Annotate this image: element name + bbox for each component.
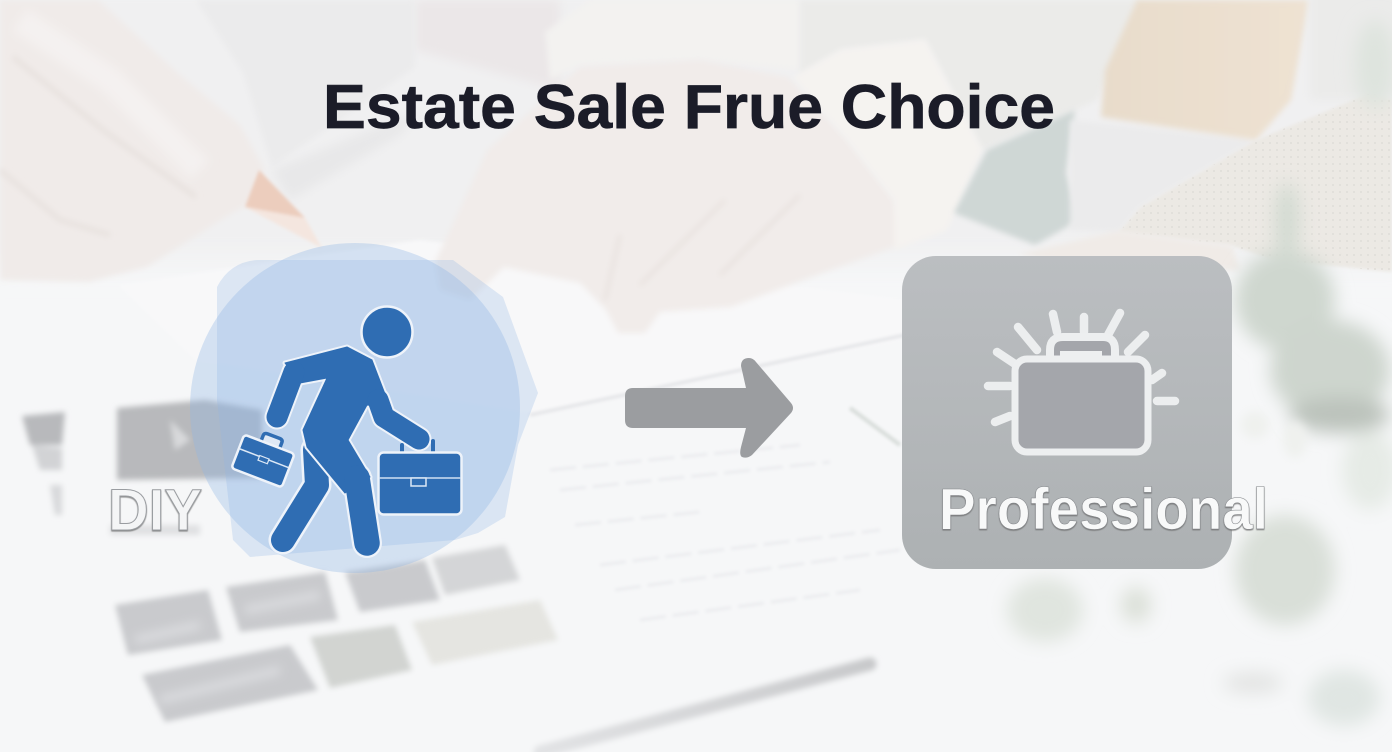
backdrop right of wood xyxy=(1310,0,1392,100)
person body xyxy=(277,347,419,543)
label: DIY: DIY xyxy=(108,478,202,543)
icon: person carrying two briefcases xyxy=(231,306,462,543)
pink backdrop xyxy=(415,0,560,90)
person body outline xyxy=(277,347,419,543)
shadow below newspaper xyxy=(272,110,420,200)
sheet of paper xyxy=(118,240,910,415)
pencil xyxy=(245,170,322,248)
sleeve knit texture xyxy=(1119,93,1392,272)
right sleeve xyxy=(1119,93,1392,272)
right briefcase xyxy=(378,452,462,514)
label: Professional: Professional xyxy=(939,477,1268,542)
icon: glowing briefcase xyxy=(988,313,1175,452)
irregular blob shape xyxy=(217,260,538,557)
title: Estate Sale Frue Choice xyxy=(323,73,1055,142)
white blossoms xyxy=(1241,411,1307,458)
second pen xyxy=(850,408,900,445)
sweater arm xyxy=(800,0,1141,150)
sweater top xyxy=(545,0,800,80)
pen at bottom xyxy=(540,664,870,752)
desk tone xyxy=(0,0,1392,260)
left hand xyxy=(0,0,263,282)
arrow xyxy=(625,358,793,458)
newspaper xyxy=(196,0,415,167)
sweater cuff xyxy=(793,40,982,250)
circle shape xyxy=(190,243,520,573)
table surface xyxy=(1070,120,1256,232)
briefcase body xyxy=(1015,359,1148,452)
left briefcase xyxy=(231,426,298,487)
right briefcase handles xyxy=(402,441,433,452)
center hand xyxy=(435,60,905,333)
blurred document text lines xyxy=(550,445,900,620)
photo sheet thumbnails xyxy=(22,400,558,722)
dark green cuff xyxy=(954,110,1079,245)
person head xyxy=(362,306,412,358)
panel: Professional xyxy=(902,256,1268,569)
briefcase rays xyxy=(988,313,1175,422)
briefcase handle xyxy=(1050,337,1115,362)
thumbnail highlights xyxy=(135,595,320,700)
panel background xyxy=(902,256,1232,569)
right hand xyxy=(1018,231,1240,270)
handle opening xyxy=(1060,351,1102,363)
plant foliage xyxy=(1007,20,1392,726)
wooden table xyxy=(1101,0,1309,140)
back leg xyxy=(283,450,317,540)
panel: DIY blue blob xyxy=(190,243,538,573)
